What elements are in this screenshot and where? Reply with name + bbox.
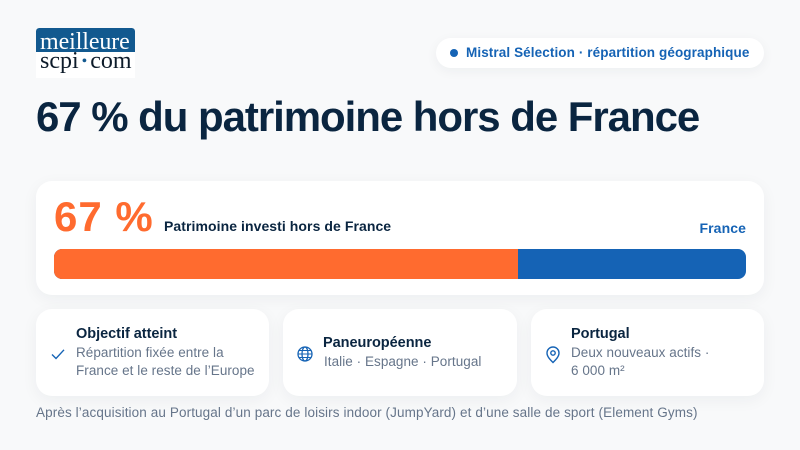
card heading: Portugal bbox=[571, 326, 630, 342]
logo blue band bbox=[36, 28, 135, 52]
icon: check bbox=[52, 349, 64, 360]
card: paneuropéenne bbox=[283, 309, 517, 396]
icon: map pin bbox=[546, 346, 560, 364]
logo word: scpi.com: scpi•com bbox=[40, 48, 132, 74]
card text: Deux nouveaux actifs · bbox=[571, 345, 709, 360]
icon: globe bbox=[297, 346, 313, 362]
card: portugal bbox=[531, 309, 764, 396]
title: 67 % du patrimoine hors de France bbox=[36, 93, 699, 140]
card text: 6 000 m² bbox=[571, 363, 625, 378]
logo bbox=[36, 28, 135, 78]
panel: main progress bbox=[36, 181, 764, 295]
card text bbox=[571, 345, 709, 378]
footnote: Après l’acquisition au Portugal d’un parc de loisirs indoor (JumpYard) et d’une salle de sport (Element Gyms) bbox=[36, 405, 698, 420]
France label: France bbox=[699, 220, 746, 236]
badge: fund name bbox=[436, 38, 764, 68]
badge dot bbox=[450, 49, 458, 57]
card text: Répartition fixée entre la bbox=[76, 345, 224, 360]
big number: 67 % bbox=[54, 193, 154, 240]
bar label: Patrimoine investi hors de France bbox=[164, 218, 391, 234]
bar segment: outside France 67% bbox=[54, 249, 518, 279]
card text: Italie · Espagne · Portugal bbox=[324, 354, 481, 369]
card heading: Paneuropéenne bbox=[323, 335, 431, 351]
card: objectif atteint bbox=[36, 309, 269, 396]
card text: France et le reste de l’Europe bbox=[76, 363, 255, 378]
logo word: meilleure: meilleure bbox=[40, 29, 130, 55]
stacked bar bbox=[54, 249, 746, 279]
badge text: Mistral Sélection · répartition géographique bbox=[466, 45, 749, 60]
card heading: Objectif atteint bbox=[76, 326, 177, 342]
card text bbox=[76, 345, 255, 378]
